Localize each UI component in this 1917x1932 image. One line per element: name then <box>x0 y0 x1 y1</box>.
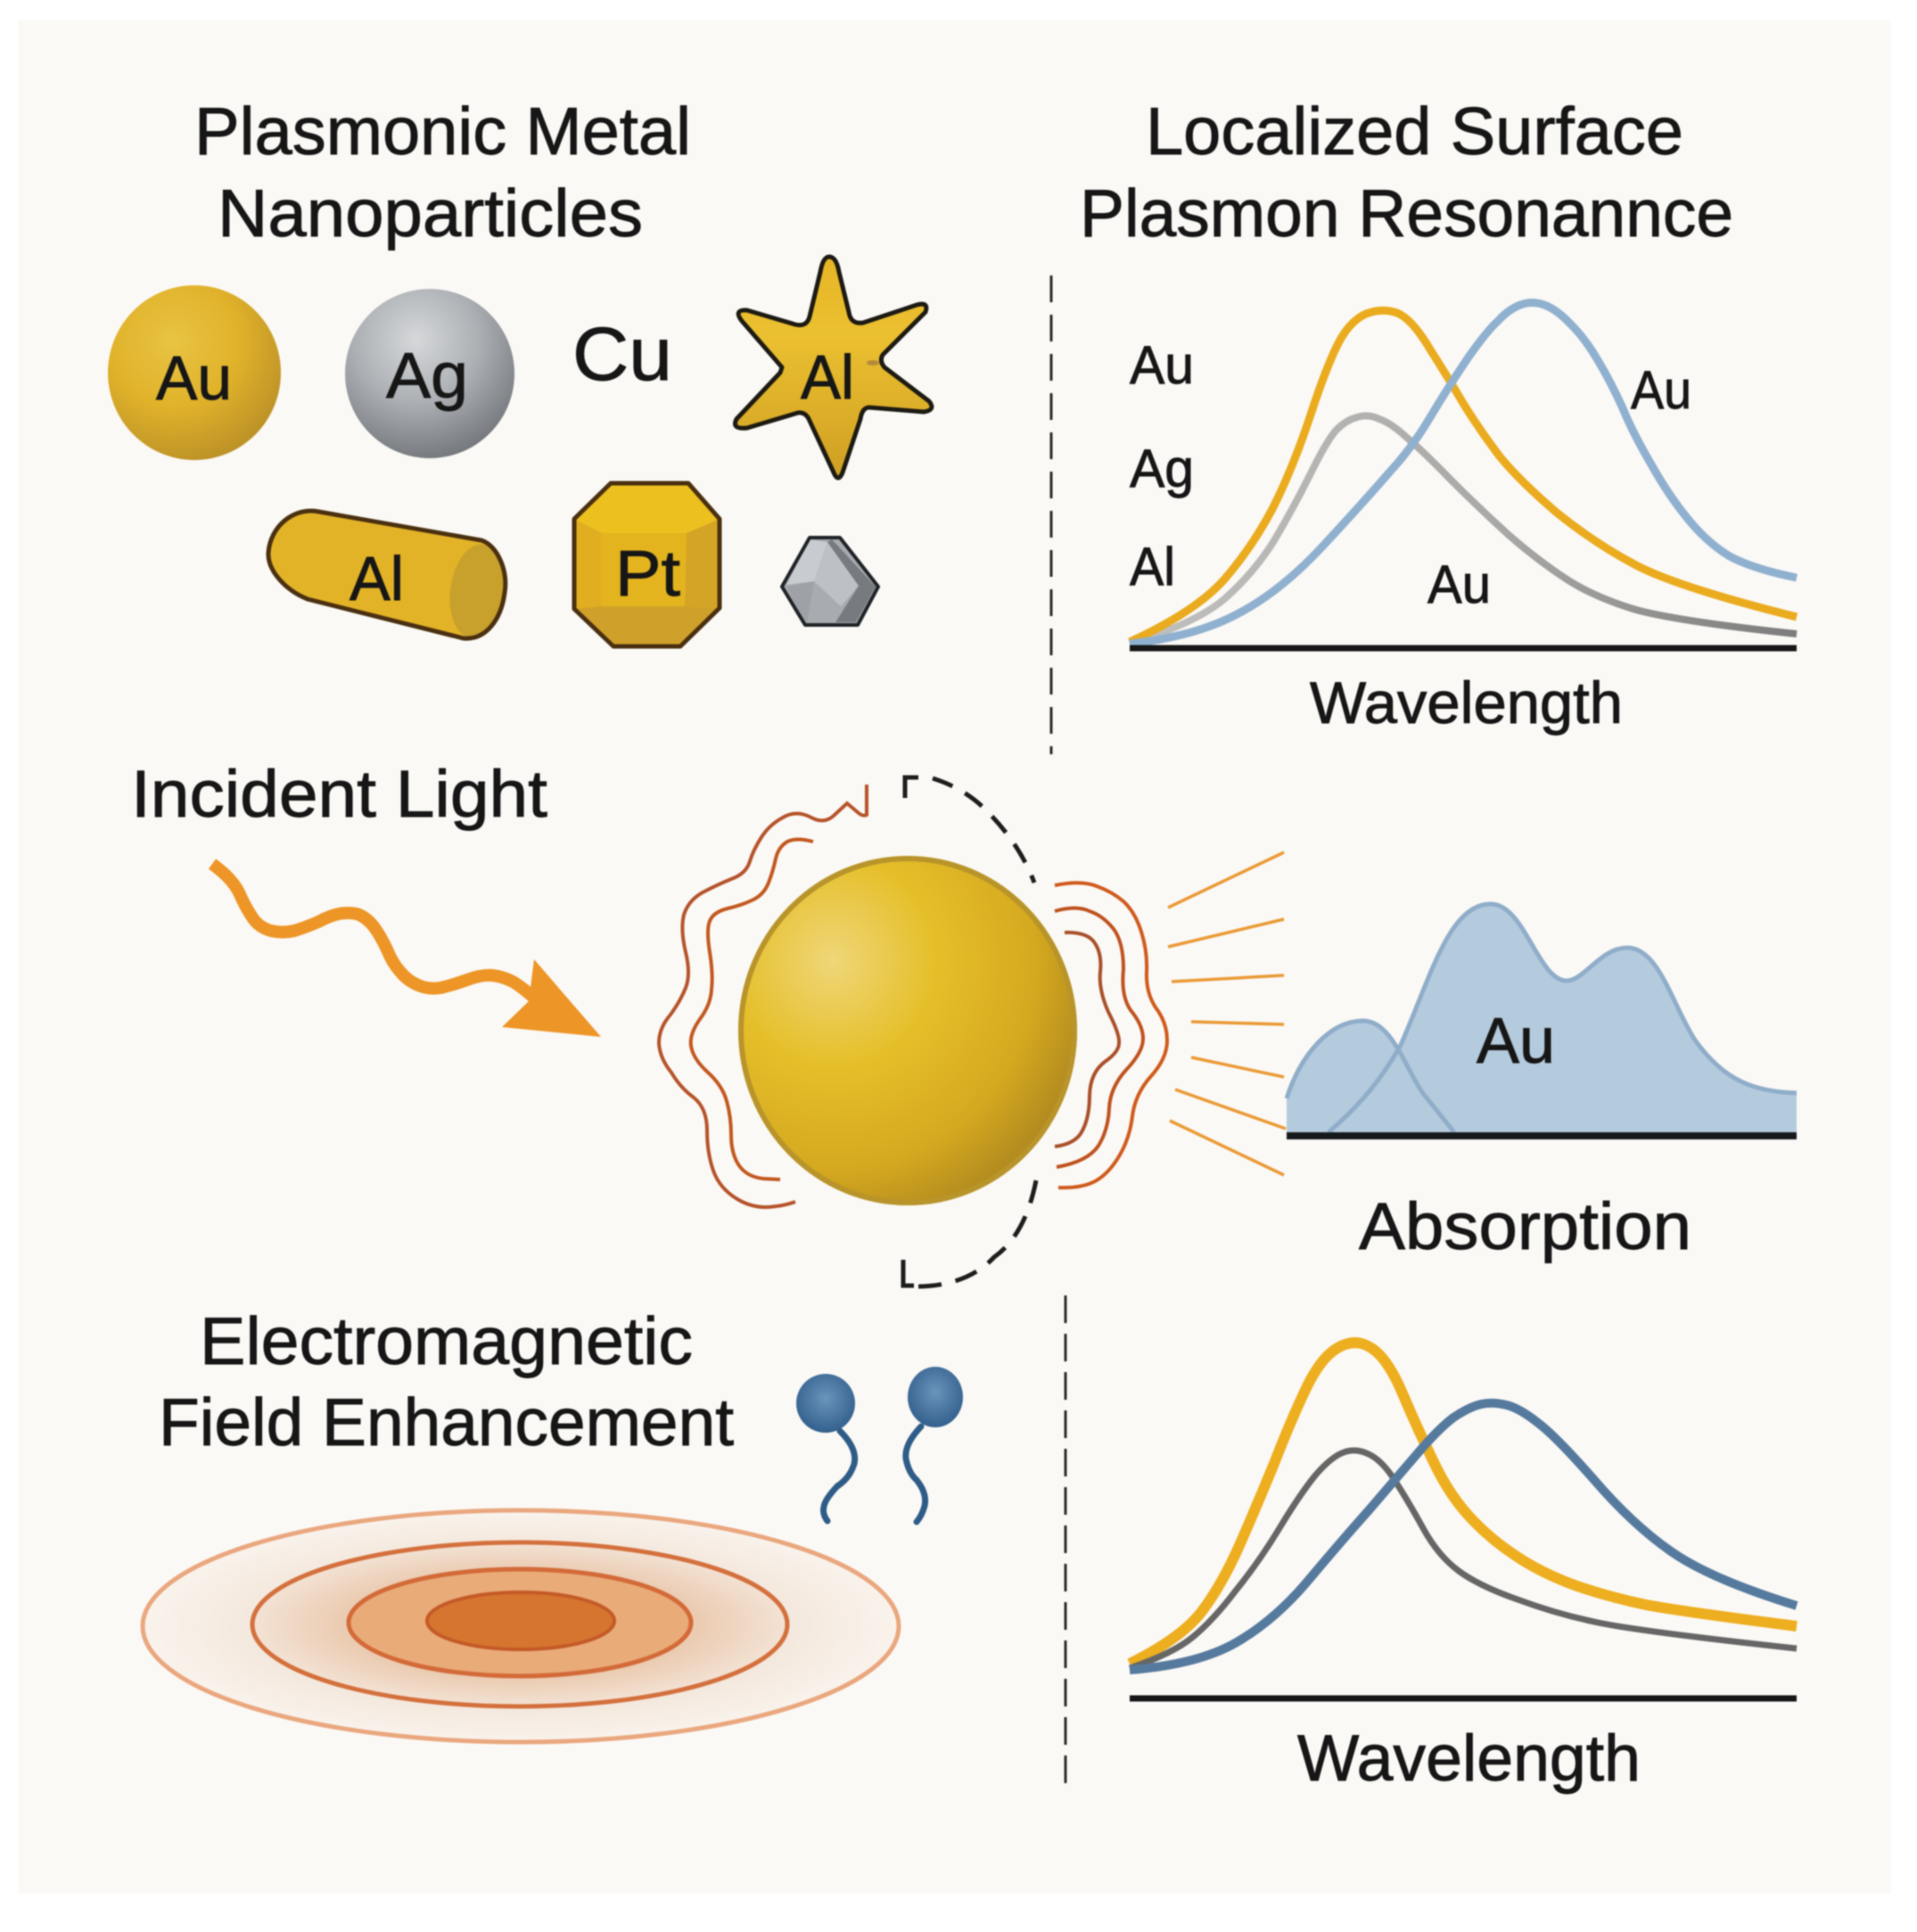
particle: Al star <box>735 257 932 478</box>
chart: absorption area <box>1287 904 1797 1136</box>
heading: localized surface plasmon resonance: Plasmon Resonannce <box>1080 176 1733 251</box>
axis label: absorption: Absorption <box>1359 1189 1691 1263</box>
labels: curve legends <box>1130 335 1691 614</box>
waves: left oscillations <box>659 785 867 1207</box>
particle: Al star: Al <box>801 342 854 412</box>
waves: right oscillations <box>1055 883 1167 1188</box>
panel: plasmonic metal nanoparticles <box>108 94 932 646</box>
particle: Ag sphere <box>345 289 514 458</box>
axis label: wavelength: Wavelength <box>1310 670 1623 736</box>
panel: incident light on nanoparticle <box>131 757 1286 1287</box>
heading: localized surface plasmon resonance <box>1080 94 1733 251</box>
heading: plasmonic metal nanoparticles: Plasmonic Metal <box>194 94 691 169</box>
labels: curve legends: Au <box>1631 360 1691 420</box>
divider: top dashed <box>1050 275 1052 754</box>
particle: Pt faceted <box>574 483 720 646</box>
heading: localized surface plasmon resonance: Localized Surface <box>1146 94 1683 169</box>
label: Au absorption: Au <box>1477 1006 1555 1077</box>
label: incident light: Incident Light <box>131 757 547 831</box>
panel: electromagnetic field enhancement <box>143 1303 963 1742</box>
labels: curve legends: Ag <box>1130 439 1194 498</box>
chart: enhanced wavelength spectra <box>1130 1343 1797 1698</box>
illustration: large gold nanoparticle <box>738 856 1077 1205</box>
particle: Al rod: Al <box>350 544 404 613</box>
panel: absorption <box>1287 904 1797 1263</box>
heading: electromagnetic field enhancement <box>159 1303 734 1459</box>
axis label: wavelength: Wavelength <box>1297 1722 1641 1795</box>
heading: electromagnetic field enhancement: Field Enhancement <box>159 1385 734 1459</box>
heading: plasmonic metal nanoparticles: Nanoparticles <box>218 176 643 251</box>
arrow: wavy incident light <box>212 864 601 1037</box>
particle: Ag sphere: Ag <box>386 341 468 412</box>
particle: Al rod <box>268 511 510 642</box>
particle: Au sphere <box>108 285 281 460</box>
dashed field loop: bottom <box>903 1180 1036 1287</box>
icon: molecule probes <box>796 1367 963 1522</box>
illustration: field hotspot ellipses <box>143 1510 899 1742</box>
labels: curve legends: Au <box>1427 555 1491 614</box>
particle: gray gem <box>782 538 878 625</box>
heading: plasmonic metal nanoparticles <box>194 94 691 251</box>
particle: Pt faceted: Pt <box>615 538 680 610</box>
label: Cu: Cu <box>572 312 672 396</box>
divider: bottom dashed <box>1065 1295 1066 1783</box>
particle: Au sphere: Au <box>156 343 232 413</box>
labels: curve legends: Au <box>1130 335 1194 395</box>
heading: electromagnetic field enhancement: Electromagnetic <box>200 1303 693 1378</box>
panel: lower spectra <box>1130 1343 1797 1795</box>
chart: wavelength spectra <box>1130 303 1797 648</box>
rays: scattered light <box>1168 852 1286 1175</box>
panel: localized surface plasmon resonance <box>1080 94 1797 736</box>
dashed field loop: top <box>905 777 1034 883</box>
labels: curve legends: Al <box>1130 537 1175 596</box>
